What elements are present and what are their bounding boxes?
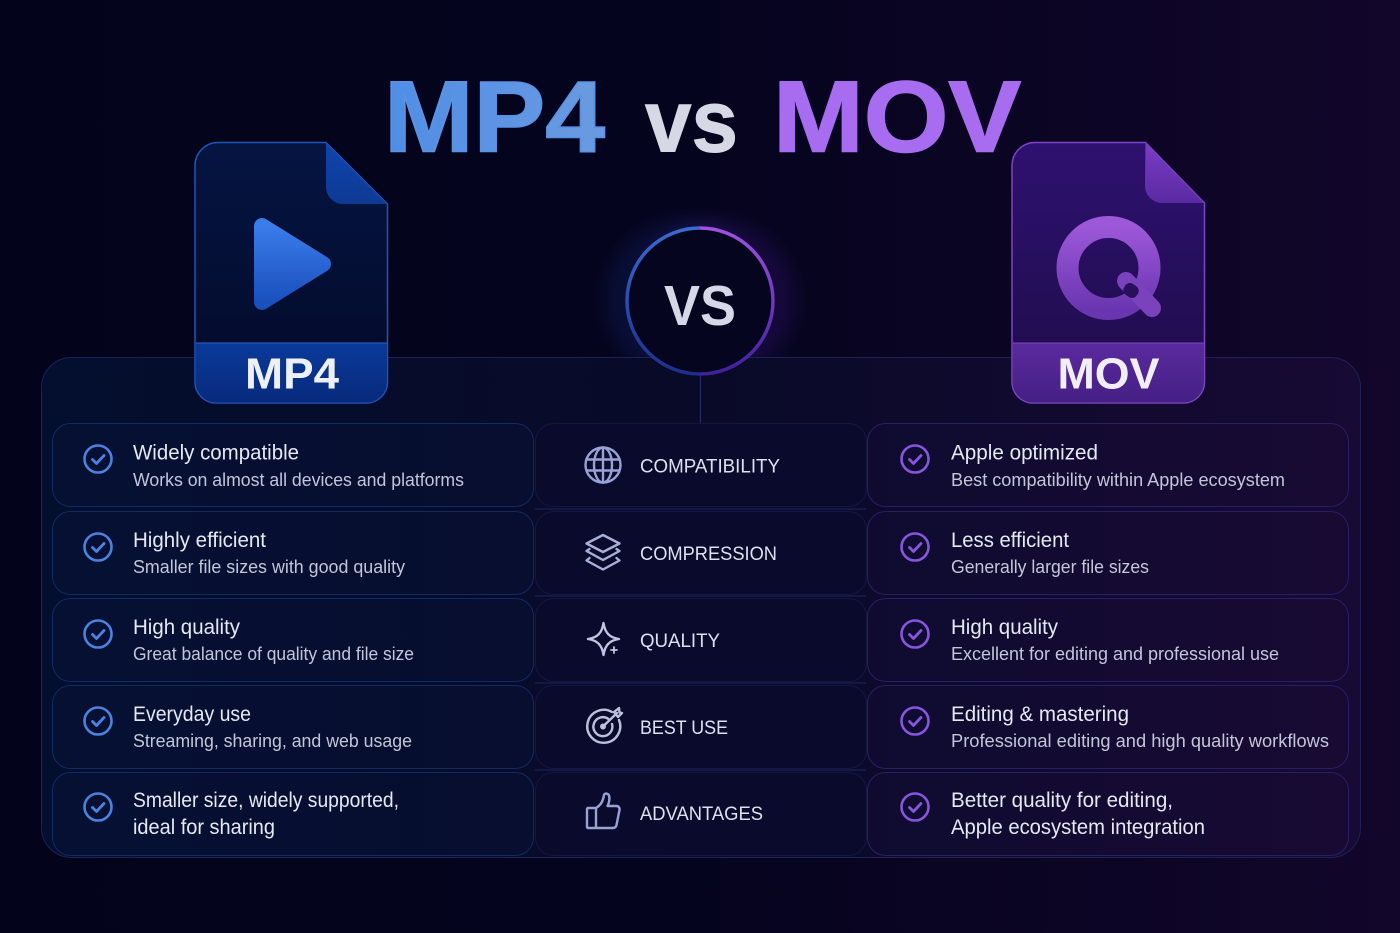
icon: MOV file [1012, 142, 1204, 403]
row: best use MP4: Streaming, sharing, and web usage [133, 731, 412, 751]
row: compression MOV: Generally larger file sizes [951, 557, 1149, 577]
icon: MP4 file: MP4 [245, 350, 340, 398]
row: compatibility MOV [868, 424, 1348, 506]
title: MP4 [384, 62, 605, 174]
icon: MOV file: MOV [1058, 350, 1160, 398]
row: best use MOV [868, 686, 1348, 768]
category: compatibility: COMPATIBILITY [640, 456, 780, 478]
icon: globe [586, 448, 620, 482]
row: compression MP4: Highly efficient [133, 529, 266, 552]
icon: play triangle [262, 226, 323, 302]
row: quality MOV [868, 598, 1348, 682]
row: quality MOV: Excellent for editing and professional use [951, 644, 1279, 664]
row: best use MP4: Everyday use [133, 703, 251, 726]
row: compression MP4 [52, 512, 534, 594]
category: best use [587, 708, 728, 743]
category: best use: BEST USE [640, 717, 728, 739]
row: compression MP4: Smaller file sizes with good quality [133, 557, 405, 577]
row: quality MP4 [52, 598, 534, 682]
category: quality: QUALITY [640, 630, 720, 652]
row: compatibility MP4: Works on almost all devices and platforms [133, 470, 464, 490]
category: compatibility [586, 448, 780, 482]
icon: layers [586, 535, 620, 570]
row: quality MP4: Great balance of quality and file size [133, 644, 414, 664]
row: compression MOV: Less efficient [951, 529, 1069, 552]
panel: comparison table [42, 358, 1360, 858]
row: best use MOV: Professional editing and high quality workflows [951, 731, 1329, 751]
icon: thumbs up [587, 794, 620, 828]
title [384, 62, 1021, 174]
row: compatibility MP4: Widely compatible [133, 442, 299, 464]
row: advantages MP4: Smaller size, widely supported, [133, 789, 399, 812]
icon: Q logo [1068, 227, 1152, 309]
row: quality MP4: High quality [133, 616, 240, 639]
row: best use MOV: Editing & mastering [951, 703, 1129, 726]
row: advantages MP4 [52, 772, 534, 856]
row: compatibility MOV: Apple optimized [951, 442, 1098, 464]
icon: sparkle [588, 623, 619, 655]
row: advantages MOV: Apple ecosystem integration [951, 816, 1205, 839]
column: MP4 rows [52, 424, 534, 856]
row: best use MP4 [52, 686, 534, 768]
row: advantages MP4: ideal for sharing [133, 816, 275, 839]
row: compression MOV [868, 512, 1348, 594]
row: advantages MOV [868, 772, 1348, 856]
icon: target [587, 708, 622, 743]
category: advantages: ADVANTAGES [640, 803, 763, 825]
title: vs [645, 72, 738, 170]
row: compatibility MOV: Best compatibility within Apple ecosystem [951, 470, 1285, 490]
category: compression [586, 535, 777, 570]
category: quality [588, 623, 720, 655]
category: advantages [587, 794, 763, 828]
column: MOV rows [868, 424, 1348, 856]
row: compatibility MP4 [52, 424, 534, 506]
category: compression: COMPRESSION [640, 543, 777, 565]
row: advantages MOV: Better quality for editing, [951, 789, 1173, 812]
VS badge: VS [664, 274, 736, 338]
VS badge [627, 228, 773, 374]
icon: MP4 file [195, 142, 388, 403]
column: categories [535, 424, 866, 856]
title: MOV [773, 62, 1021, 174]
row: quality MOV: High quality [951, 616, 1058, 639]
